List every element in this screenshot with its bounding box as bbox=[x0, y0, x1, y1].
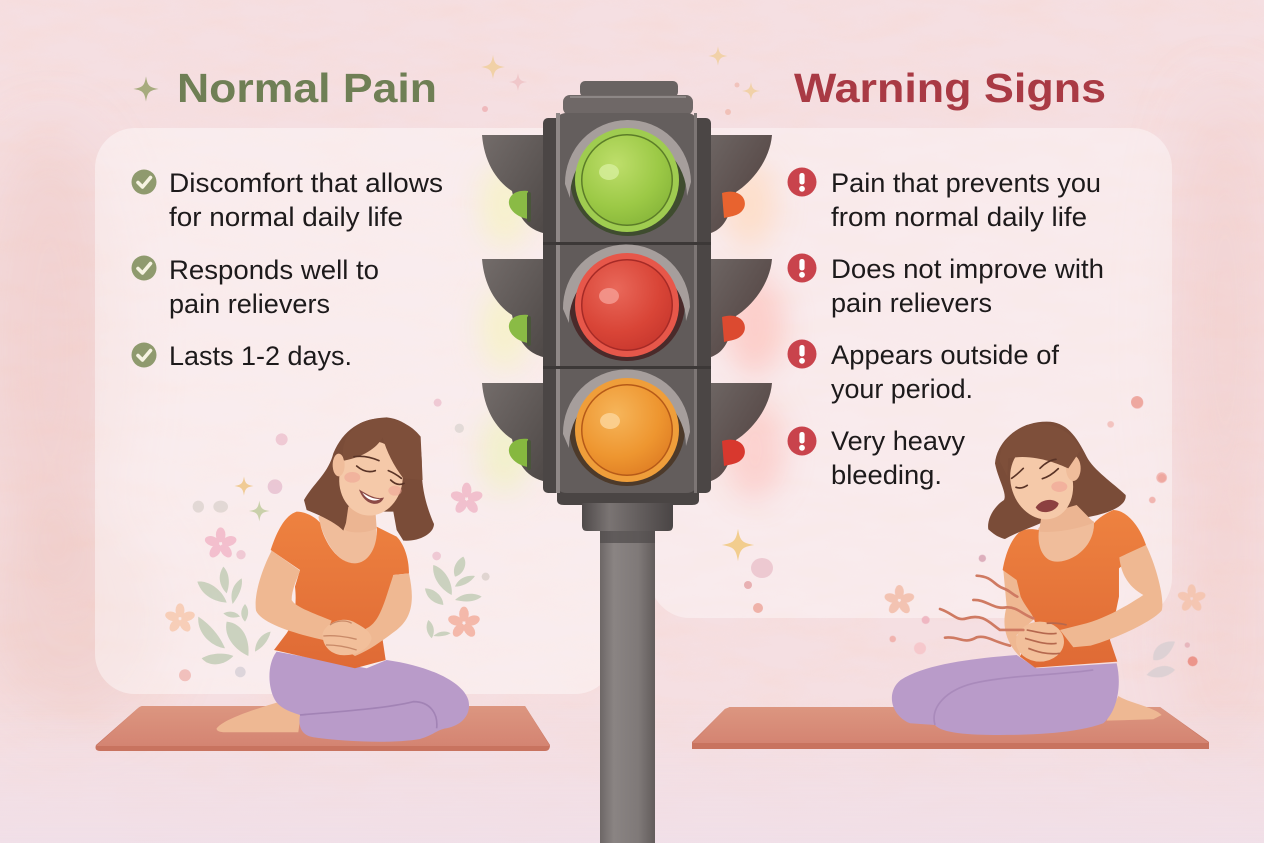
cheeks bbox=[344, 472, 360, 483]
item: heavy bleeding: Very heavy bbox=[831, 426, 965, 456]
flower bbox=[883, 585, 915, 615]
panel: warning signs bbox=[650, 128, 1172, 618]
decor: right accents bbox=[883, 397, 1207, 678]
item: outside period bbox=[788, 340, 1059, 404]
item: prevents: from normal daily life bbox=[831, 202, 1087, 232]
face bbox=[334, 437, 408, 520]
thigh fold bbox=[934, 670, 1093, 725]
face bbox=[1001, 436, 1083, 528]
yoga mat: right bbox=[692, 707, 1209, 749]
arm: viewer left bbox=[256, 551, 332, 640]
item: no improvement bbox=[788, 254, 1104, 318]
item: responds: Responds well to bbox=[169, 255, 379, 285]
item: duration: Lasts 1-2 days. bbox=[169, 341, 352, 371]
arm: viewer right bbox=[340, 573, 412, 656]
item: discomfort: for normal daily life bbox=[169, 202, 403, 232]
ear bbox=[1066, 456, 1081, 481]
arm: viewer right bbox=[1060, 545, 1162, 647]
traffic light glow bbox=[481, 163, 785, 500]
bottom fade bbox=[0, 700, 1264, 843]
visors and side lamps: top row bbox=[482, 135, 772, 233]
traffic light pole bbox=[600, 528, 655, 843]
neck bbox=[345, 505, 377, 532]
pain squiggles bbox=[940, 576, 1033, 646]
item: outside period: Appears outside of bbox=[831, 340, 1059, 370]
decor: left botanical accents bbox=[164, 399, 490, 681]
item: responds bbox=[132, 255, 379, 319]
dots bbox=[889, 397, 1198, 666]
neck and chest bbox=[1038, 512, 1094, 563]
item: prevents: Pain that prevents you bbox=[831, 168, 1101, 198]
leaves: right sprig bbox=[425, 557, 482, 638]
foot bbox=[217, 702, 301, 732]
back hair bbox=[988, 422, 1126, 539]
red light bbox=[563, 244, 690, 361]
list: normal pain bbox=[132, 168, 443, 371]
item: heavy bleeding: bleeding. bbox=[831, 460, 942, 490]
neck bbox=[1039, 505, 1094, 532]
shirt bbox=[271, 512, 409, 668]
eyes and brows bbox=[1012, 459, 1058, 488]
amber light bbox=[563, 369, 690, 486]
visors and side lamps: bottom row bbox=[482, 383, 772, 481]
hands bbox=[1016, 622, 1067, 662]
hands bbox=[323, 620, 372, 655]
green light bbox=[565, 120, 691, 236]
item: prevents bbox=[788, 168, 1101, 232]
visors and side lamps: middle row bbox=[482, 259, 772, 357]
top cap bbox=[563, 81, 693, 115]
smile bbox=[359, 489, 384, 504]
back hair bbox=[304, 417, 434, 541]
eyes and brows bbox=[354, 456, 404, 484]
fringe bbox=[1000, 423, 1081, 477]
decor: scattered dots right bbox=[744, 396, 1166, 613]
pants bbox=[269, 652, 469, 742]
panel: normal pain bbox=[95, 128, 615, 694]
item: outside period: your period. bbox=[831, 374, 973, 404]
heading: normal pain: Normal Pain bbox=[177, 65, 437, 111]
pants bbox=[892, 655, 1119, 735]
item: discomfort bbox=[132, 168, 443, 232]
decor: gold sparkle right bbox=[722, 529, 754, 561]
list: warning signs bbox=[788, 168, 1104, 490]
leaf sprig bbox=[1147, 641, 1175, 678]
character: woman in pain (warning signs) bbox=[892, 422, 1162, 735]
open mouth bbox=[1036, 500, 1059, 512]
heading: warning signs: Warning Signs bbox=[794, 65, 1106, 111]
flowers bbox=[204, 527, 238, 560]
neck and chest bbox=[318, 507, 377, 564]
sparkles around traffic light bbox=[481, 46, 760, 115]
flower: far right bbox=[1177, 584, 1207, 613]
ear bbox=[333, 454, 345, 476]
sparkles and dots bbox=[234, 476, 254, 496]
fringe bbox=[343, 418, 423, 480]
soft background tint blobs bbox=[0, 90, 1264, 760]
yoga mat: left bbox=[96, 706, 550, 751]
character: smiling woman (normal pain) bbox=[217, 417, 469, 742]
item: responds: pain relievers bbox=[169, 289, 330, 319]
leaves: left sprig bbox=[197, 567, 271, 664]
item: no improvement: pain relievers bbox=[831, 288, 992, 318]
item: no improvement: Does not improve with bbox=[831, 254, 1104, 284]
foot bbox=[1107, 696, 1162, 721]
knee fold bbox=[300, 702, 437, 728]
icon: heading sparkle bbox=[133, 76, 159, 102]
traffic light bbox=[482, 81, 772, 543]
item: discomfort: Discomfort that allows bbox=[169, 168, 443, 198]
arm: viewer left bbox=[1003, 570, 1035, 657]
shirt bbox=[1003, 510, 1146, 668]
housing bbox=[543, 113, 711, 493]
item: heavy bleeding bbox=[788, 426, 965, 490]
pole collar bbox=[557, 493, 699, 543]
cheek bbox=[1051, 481, 1067, 492]
